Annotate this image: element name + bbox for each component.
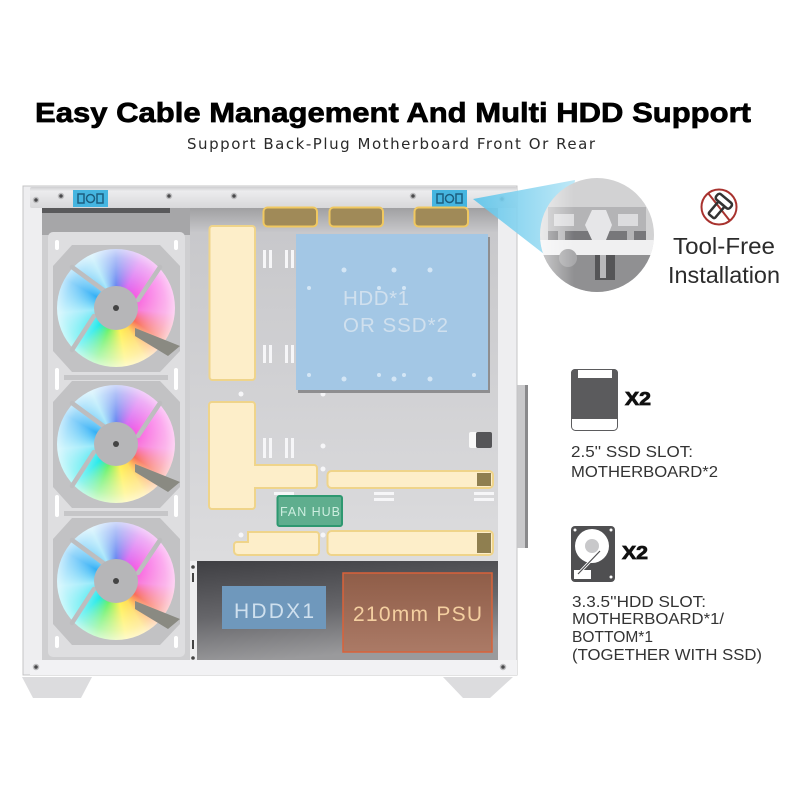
side bracket on the rear of the case [516,385,528,548]
HDD slot description: 3.3.5''HDD SLOT: [572,594,706,611]
icon: no screws [702,190,736,224]
icon: SSD [571,369,618,430]
left tool-free clip label [73,190,108,207]
top cable grommet 3 [414,208,468,226]
tool-free caption: Installation [668,262,780,288]
SSD slot description: MOTHERBOARD*2 [571,464,718,481]
yellow cable routing zone: long bar upper [328,471,493,488]
HDD bay label [222,586,326,629]
top frame rail [30,187,517,208]
shroud edge mounting holes [191,565,195,660]
yellow cable routing zone: notched bar [234,532,319,555]
zoom beam [473,180,575,268]
left foot [22,677,92,698]
plate label: HDD*1 [343,287,409,310]
HDD quantity: X2 [622,542,648,563]
PSU bay label [343,573,492,652]
PSU shroud [197,561,498,660]
rear I/O latch [469,432,492,448]
yellow cable routing zone: long bar lower [328,531,493,555]
case outer frame [23,186,517,675]
screws on the frame [34,194,506,670]
fan divider [64,511,168,516]
top cable grommet 1 [264,208,317,226]
right foot [443,677,513,698]
SSD slot description [571,444,718,481]
right tool-free clip label [432,190,467,207]
yellow cable routing zone: upper left [210,226,255,380]
fan divider [64,375,168,380]
SSD quantity: X2 [625,388,651,409]
bottom frame rail [30,660,517,675]
tool-free caption: Tool-Free [673,233,775,259]
top cable grommet 2 [330,208,383,226]
magnified tool-free clip [540,178,654,292]
HDD slot description [572,594,762,664]
HDD slot description: BOTTOM*1 [572,629,653,646]
yellow cable routing zone: T-shaped [209,402,317,509]
RGB fan 3 [53,518,180,645]
RGB fan 2 [53,381,180,508]
plate label: OR SSD*2 [343,314,448,337]
HDD slot description: (TOGETHER WITH SSD) [572,647,762,664]
RGB fan 1 [53,245,180,372]
SSD slot description: 2.5'' SSD SLOT: [571,444,693,461]
HDD bay label: HDDX1 [234,600,314,623]
icon: HDD [571,526,615,582]
motherboard tray wall [190,208,498,561]
PSU bay label: 210mm PSU [353,603,482,626]
cable tie slots [238,250,494,538]
fan hub [278,496,342,526]
blue drive mount plate [296,234,490,393]
PC case side view [22,186,528,698]
subtitle: Support Back-Plug Motherboard Front Or Rear [187,135,596,153]
tool-free caption [668,233,780,288]
plate label [343,287,448,337]
fan hub: FAN HUB [280,505,340,519]
title: Easy Cable Management And Multi HDD Support [35,97,751,128]
fan bay [42,208,190,660]
HDD slot description: MOTHERBOARD*1/ [572,611,725,628]
right rail [498,208,516,660]
